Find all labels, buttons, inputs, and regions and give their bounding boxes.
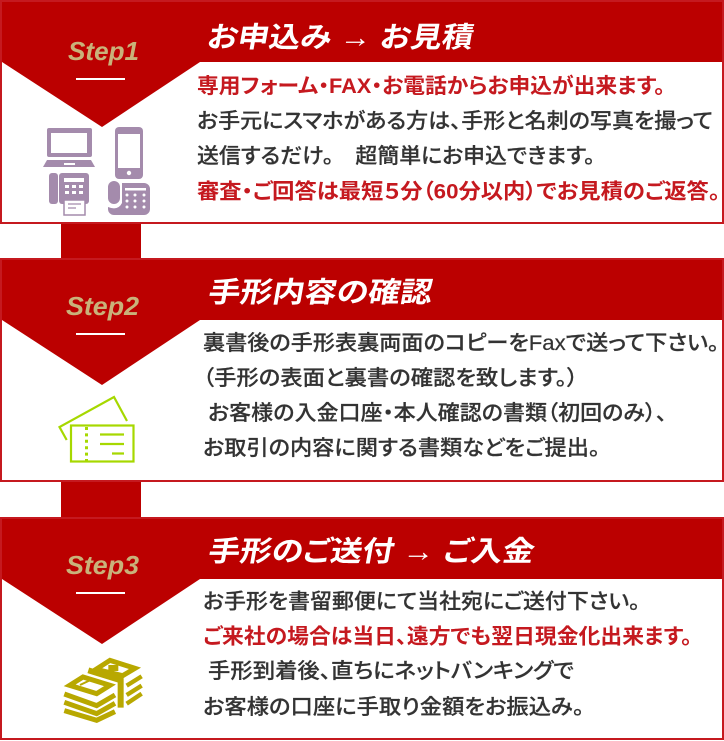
step underline	[76, 78, 125, 80]
text block: 審査・ご回答は最短５分（60分以内）でお見積のご返答。	[197, 180, 720, 204]
smartphone	[115, 127, 143, 179]
text block	[203, 590, 692, 719]
step label: Step1	[68, 36, 139, 66]
text block: 送信するだけ。 超簡単にお申込できます。	[197, 145, 595, 168]
step underline	[76, 333, 125, 335]
text block: お取引の内容に関する書類などをご提出。	[203, 437, 600, 460]
icon: stack of money	[64, 660, 142, 720]
panel: step 3	[1, 518, 723, 739]
step label: Step3	[66, 550, 140, 580]
heading: 手形のご送付 → ご入金	[206, 535, 538, 568]
text block	[203, 332, 719, 460]
telephone	[108, 181, 150, 215]
text block	[197, 74, 720, 204]
header band with arrow	[2, 519, 722, 644]
panel: step 1	[1, 1, 723, 223]
fax	[49, 173, 89, 215]
icon: laptop, phone, fax, telephone	[43, 127, 150, 215]
text block: お手形を書留郵便にて当社宛にご送付下さい。	[203, 590, 640, 614]
heading: 手形内容の確認	[206, 277, 436, 309]
heading: お申込み → お見積	[205, 22, 477, 54]
step label: Step2	[66, 291, 140, 321]
header band with arrow	[2, 2, 722, 127]
text block: お客様の口座に手取り金額をお振込み。	[203, 696, 584, 719]
text block: 手形到着後、直ちにネットバンキングで	[208, 660, 574, 683]
text block: （手形の表面と裏書の確認を致します。）	[203, 367, 578, 390]
text block: 専用フォーム・FAX・お電話からお申込が出来ます。	[197, 74, 665, 98]
text block: お客様の入金口座・本人確認の書類（初回のみ）、	[208, 402, 667, 425]
connector: step 2 to step 3	[61, 480, 141, 519]
laptop	[43, 128, 95, 167]
text block: ご来社の場合は当日、遠方でも翌日現金化出来ます。	[203, 624, 692, 648]
connector: step 1 to step 2	[61, 222, 141, 260]
step underline	[76, 592, 125, 594]
panel: step 2	[1, 259, 723, 481]
text block: お手元にスマホがある方は、手形と名刺の写真を撮って	[197, 110, 713, 133]
header band with arrow	[2, 260, 722, 385]
icon: bills	[60, 397, 134, 462]
text block: 裏書後の手形表裏両面のコピーをFaxで送って下さい。	[203, 332, 719, 355]
